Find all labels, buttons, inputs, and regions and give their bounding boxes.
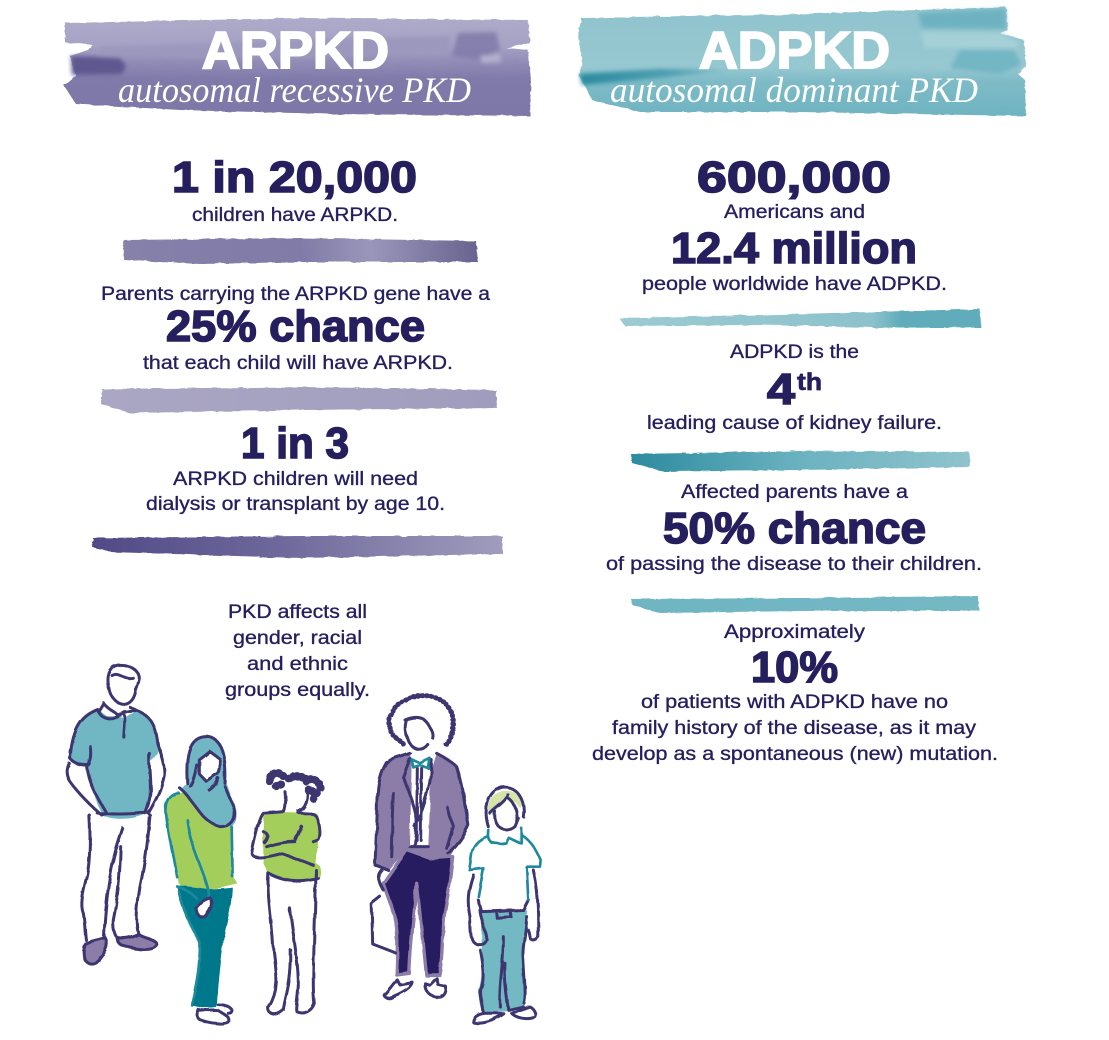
subheading: autosomal recessive PKD: autosomal recessive PKD: [118, 70, 471, 110]
stat: 50% chance: of passing the disease to their children.: [606, 553, 982, 575]
stat: 10% no family history: family history of the disease, as it may: [612, 717, 976, 739]
subheading: autosomal dominant PKD: autosomal dominant PKD: [610, 70, 978, 110]
divider: purple brush 1: [123, 238, 478, 264]
stat: 10% no family history: Approximately: [724, 621, 865, 643]
stat: 1 in 3: ARPKD children will need: [173, 468, 418, 490]
person: woman in hijab: [165, 735, 237, 1024]
text: PKD affects all groups: groups equally.: [225, 679, 370, 701]
person: girl with crossed arms: [252, 773, 321, 1014]
stat: 50% chance: 50% chance: [663, 504, 926, 553]
panel: ARPKD column: [64, 18, 531, 701]
stat: 4th leading cause: leading cause of kidney failure.: [647, 412, 942, 434]
stat: 600,000 and 12.4 million: 600,000: [697, 153, 891, 202]
text: PKD affects all groups: PKD affects all: [228, 601, 367, 623]
divider: teal brush 2: [631, 451, 970, 471]
heading: ADPKD: ADPKD: [699, 22, 890, 80]
stat: 600,000 and 12.4 million: people worldwide have ADPKD.: [642, 273, 947, 295]
panel: ADPKD column: [578, 7, 1026, 765]
divider: teal brush 3: [631, 596, 979, 613]
stat: 600,000 and 12.4 million: [642, 153, 947, 295]
stat: 4th leading cause: th: [797, 369, 822, 396]
stat: 25% chance: 25% chance: [166, 302, 425, 351]
stat: 4th leading cause: ADPKD is the: [730, 341, 859, 363]
person: boy in white polo: [468, 787, 541, 1023]
stat: 1 in 3: [146, 419, 445, 515]
stat: 25% chance: [101, 283, 490, 374]
stat: 25% chance: Parents carrying the ARPKD gene have a: [101, 283, 490, 305]
stat: 1 in 3: dialysis or transplant by age 10.: [146, 493, 445, 515]
divider: purple brush 3: [92, 536, 503, 558]
text: PKD affects all groups: gender, racial: [233, 627, 362, 649]
illustration: group of people: [67, 665, 541, 1024]
stat: 10% no family history: of patients with ADPKD have no: [641, 691, 948, 713]
person: man in teal polo: [67, 665, 164, 964]
stat: 600,000 and 12.4 million: 12.4 million: [671, 224, 917, 273]
stat: 10% no family history: [592, 621, 998, 765]
stat: 1 in 20,000: 1 in 20,000: [172, 153, 417, 202]
heading: ARPKD: ARPKD: [202, 22, 389, 80]
text: PKD affects all groups: [225, 601, 370, 701]
text: PKD affects all groups: and ethnic: [247, 653, 348, 675]
stat: 1 in 3: 1 in 3: [241, 419, 349, 468]
stat: 10% no family history: 10%: [751, 643, 838, 692]
stat: 1 in 20,000: [172, 153, 417, 226]
divider: teal brush 1: [619, 309, 981, 328]
stat: 4th leading cause: [647, 341, 942, 434]
stat: 10% no family history: develop as a spontaneous (new) mutation.: [592, 743, 998, 765]
stat: 50% chance: Affected parents have a: [681, 481, 908, 503]
stat: 600,000 and 12.4 million: Americans and: [724, 201, 865, 223]
person: man in purple blazer: [372, 696, 468, 998]
divider: purple brush 2: [101, 387, 497, 413]
stat: 1 in 20,000: children have ARPKD.: [192, 204, 398, 226]
stat: 4th leading cause: 4: [767, 365, 796, 414]
stat: 50% chance: [606, 481, 982, 575]
header: ARPKD watercolor banner: [64, 18, 531, 116]
header: ADPKD watercolor banner: [578, 7, 1026, 116]
stat: 25% chance: that each child will have ARPKD.: [143, 352, 453, 374]
